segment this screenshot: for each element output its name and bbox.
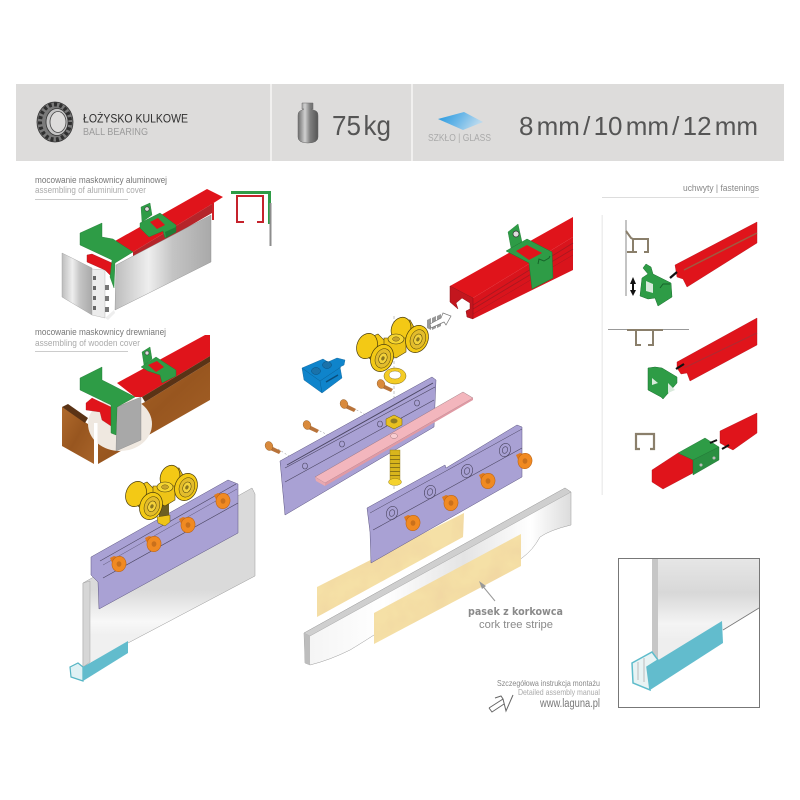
washer	[384, 368, 406, 384]
text: ball bearing	[83, 112, 188, 138]
heading: wooden cover: assembling of wooden cover	[35, 338, 140, 348]
fastening: ceiling mount	[608, 318, 757, 399]
icon: weight	[298, 103, 318, 143]
exploded: pink strip	[315, 392, 473, 486]
fastening: rail connector	[636, 413, 757, 489]
profile section: aluminium	[231, 191, 272, 246]
text: glass thickness: 8 mm / 10 mm / 12 mm	[519, 111, 758, 141]
note: assembly manual: Szczegółowa instrukcja montażu	[497, 678, 600, 688]
heading: fastenings: uchwyty | fastenings	[683, 183, 759, 194]
blue bottom guide	[70, 641, 128, 681]
exploded: glass panel	[304, 488, 571, 665]
diagram: aluminium cover assembly	[62, 189, 272, 320]
diagram: main rail with clip	[450, 217, 573, 319]
text: ball bearing: ŁOŻYSKO KULKOWE	[83, 112, 188, 126]
note: assembly manual	[489, 678, 600, 712]
note: assembly manual: Detailed assembly manual	[518, 687, 600, 697]
callout: cork tree stripe: pasek z korkowca	[468, 605, 563, 618]
inset: bottom guide close-up	[618, 558, 760, 708]
arrow: insert rail into carriage	[427, 313, 451, 330]
callout: cork tree stripe	[468, 581, 563, 631]
heading: aluminium cover: assembling of aluminium cover	[35, 185, 146, 195]
callout: cork tree stripe: cork tree stripe	[479, 619, 553, 631]
gold wheel carriage	[122, 462, 201, 526]
heading: wooden cover: mocowanie maskownicy drewnianej	[35, 327, 166, 337]
heading: aluminium cover: mocowanie maskownicy aluminowej	[35, 175, 167, 185]
heading: wooden cover	[35, 327, 166, 352]
text: glass: SZKŁO | GLASS	[428, 133, 491, 144]
blue guide profile	[632, 621, 723, 690]
heading: aluminium cover	[35, 175, 167, 200]
icon: ball bearing	[37, 102, 73, 142]
text: ball bearing: BALL BEARING	[83, 126, 148, 138]
exploded: small screws	[264, 378, 393, 458]
note: assembly manual: www.laguna.pl	[539, 698, 600, 710]
glass panel	[83, 488, 255, 667]
icon: glass pane	[438, 112, 483, 130]
exploded: upper purple plate	[280, 377, 436, 515]
icon: screw and wrench	[489, 695, 513, 712]
diagram: wooden cover assembly	[62, 335, 210, 465]
exploded: cork strip on glass	[374, 534, 521, 644]
exploded: nut and bolt	[386, 415, 402, 486]
header band	[16, 84, 784, 161]
fastening: wall mount	[626, 220, 757, 306]
diagram: assembled door with carriage	[70, 462, 255, 681]
purple carrier plate	[91, 480, 238, 609]
exploded: cork strip behind plate	[317, 513, 464, 617]
exploded: blue block	[302, 358, 345, 393]
text: load 75 kg: 75 kg	[332, 110, 391, 141]
exploded: gold carriage	[353, 314, 432, 490]
exploded: lower purple plate	[367, 425, 534, 563]
